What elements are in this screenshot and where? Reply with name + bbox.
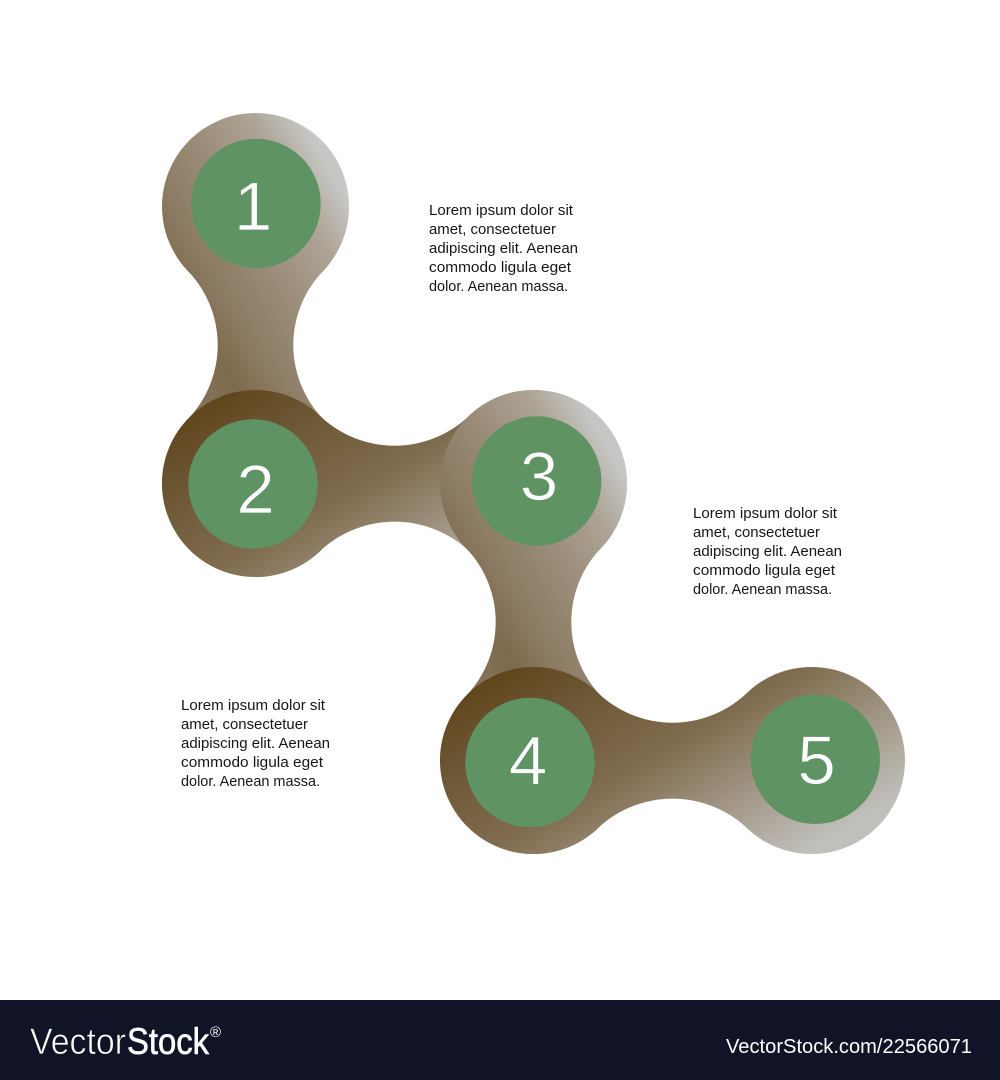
- text block: middle right: Lorem ipsum dolor sit: [693, 506, 837, 522]
- step 3 badge: 3: [520, 438, 558, 515]
- step 2 badge: 2: [236, 451, 275, 528]
- step 5 badge: [751, 695, 880, 824]
- step 1 badge: 1: [234, 168, 272, 245]
- step 5 badge: 5: [797, 722, 836, 799]
- logo word: Stock: Stock: [127, 1021, 209, 1062]
- step 4 badge: 4: [509, 722, 547, 799]
- text block: top: commodo ligula eget: [429, 260, 571, 276]
- text block: top: Lorem ipsum dolor sit: [429, 203, 573, 219]
- connector: step 4 to step 5: [440, 667, 905, 854]
- step 2 badge: [188, 419, 318, 549]
- text block: middle right: adipiscing elit. Aenean: [693, 544, 842, 560]
- text block: lower left: commodo ligula eget: [181, 755, 323, 771]
- text block: lower left: amet, consectetuer: [181, 717, 308, 733]
- connector: step 2 to step 3: [162, 390, 627, 577]
- text block: middle right: amet, consectetuer: [693, 525, 820, 541]
- image id: VectorStock.com/22566071: [726, 1035, 972, 1058]
- text block: middle right: commodo ligula eget: [693, 563, 835, 579]
- text block: top: adipiscing elit. Aenean: [429, 241, 578, 257]
- text block: lower left: dolor. Aenean massa.: [181, 774, 320, 790]
- registered mark: ®: [210, 1024, 221, 1041]
- text block: top: [429, 203, 578, 295]
- text block: top: amet, consectetuer: [429, 222, 556, 238]
- connector: step 1 to step 2: [162, 113, 349, 577]
- connector: step 3 to step 4: [440, 390, 627, 854]
- footer bar: [0, 1000, 1000, 1080]
- text block: middle right: [693, 506, 842, 598]
- step 4 badge: [465, 698, 595, 827]
- step 1 badge: [191, 139, 321, 268]
- text block: lower left: Lorem ipsum dolor sit: [181, 698, 325, 714]
- text block: lower left: adipiscing elit. Aenean: [181, 736, 330, 752]
- step 3 badge: [472, 416, 601, 546]
- text block: top: dolor. Aenean massa.: [429, 279, 568, 295]
- text block: lower left: [181, 698, 330, 790]
- text block: middle right: dolor. Aenean massa.: [693, 582, 832, 598]
- logo word: Vector: Vector: [30, 1021, 126, 1062]
